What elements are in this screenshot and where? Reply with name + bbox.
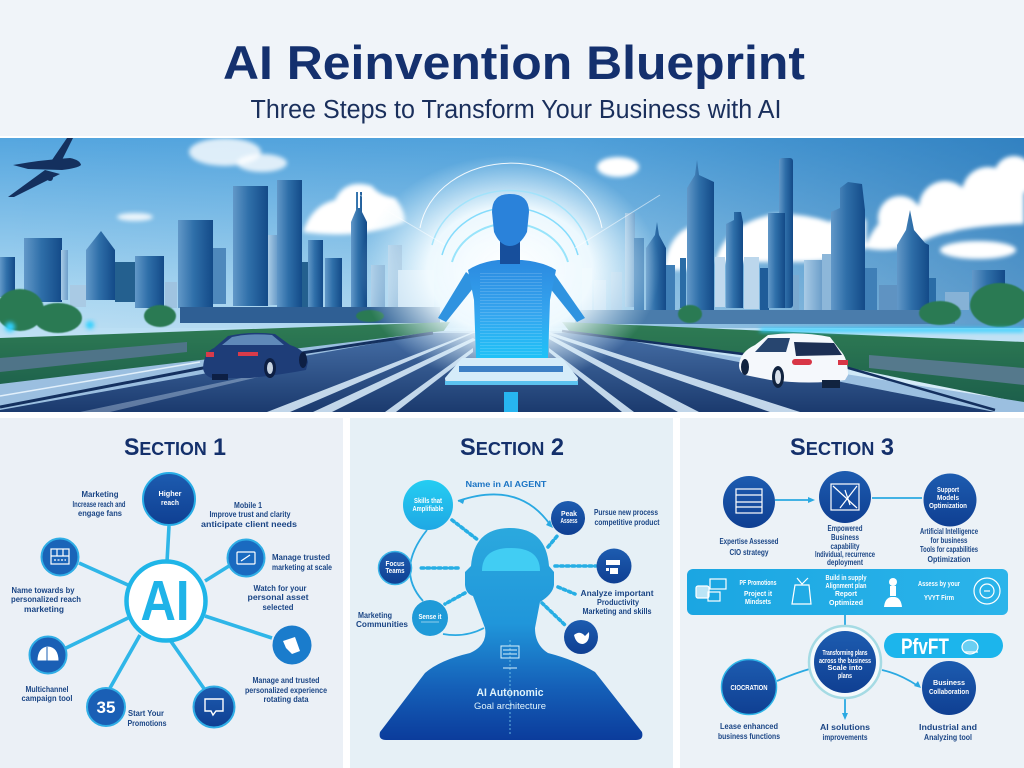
label: lower left: Multichannel — [26, 685, 68, 694]
skyline left — [0, 180, 434, 316]
label: top right: anticipate client needs — [201, 520, 298, 529]
node: lower right: Business — [933, 680, 965, 687]
silhouette label: Goal architecture — [474, 701, 546, 712]
node: top circle — [143, 473, 195, 525]
trees — [0, 283, 1024, 333]
panel: section 3 — [680, 418, 1024, 768]
label: right top: competitive product — [594, 518, 660, 527]
node: top right: Models — [937, 495, 959, 502]
node: lower right — [922, 661, 976, 715]
label: right lower: Analyze important — [580, 589, 654, 598]
band text 2: Optimized — [829, 600, 863, 607]
node: lower left — [722, 660, 776, 714]
node: top left cyan: Skills that — [414, 498, 443, 505]
fences — [0, 342, 187, 372]
label: top left: Increase reach and — [72, 500, 126, 509]
subtitle: Three Steps to Transform Your Business with AI — [250, 96, 782, 124]
label: bottom middle — [820, 723, 871, 742]
label: right top — [594, 508, 660, 527]
node: top right: Assess — [560, 518, 578, 525]
band text 1: Project it — [744, 591, 773, 598]
node icon: megaphone — [272, 626, 312, 664]
node: left: Teams — [386, 568, 405, 575]
hub: AI — [126, 562, 206, 640]
label: top right: for business — [930, 536, 968, 545]
node icon: chat — [194, 686, 234, 728]
AI humanoid figure — [438, 194, 585, 358]
band text 2: Build in supply — [826, 575, 867, 582]
node: top circle: reach — [161, 500, 179, 507]
label: top middle: deployment — [827, 558, 863, 567]
pill badge: PfvFT — [901, 634, 949, 659]
label: top middle: capability — [830, 542, 860, 551]
label: top right: Artificial Intelligence — [920, 527, 978, 536]
band icon: gauge — [974, 578, 1000, 604]
glow lines — [5, 321, 1024, 332]
hub: AI: AI — [140, 569, 190, 633]
label: left middle: marketing — [24, 605, 64, 614]
label: right upper: Manage trusted — [272, 553, 330, 562]
node: lower left: Sense it — [418, 614, 442, 621]
label: left lower — [356, 611, 409, 629]
node: left: Focus — [386, 561, 405, 568]
label: top left: Marketing — [82, 490, 119, 499]
node: central hub — [809, 626, 881, 698]
capability band — [687, 569, 1008, 615]
node icon: right — [596, 548, 632, 584]
band text 2: Alignment plan — [826, 583, 866, 590]
label: top left: engage fans — [78, 509, 123, 518]
node: lower right: Collaboration — [929, 689, 969, 696]
node: central hub: plans — [838, 673, 852, 680]
node: top left cyan — [403, 480, 453, 530]
white car — [739, 333, 848, 388]
greenery — [0, 322, 450, 384]
band text 1: PF Promotions — [740, 580, 777, 587]
hub-and-spoke links — [66, 526, 272, 690]
label: top left — [720, 537, 779, 557]
label: top middle: Business — [831, 533, 859, 542]
node: central hub: Scale into — [828, 665, 862, 672]
band text 3: YVYT Firm — [924, 595, 954, 602]
node icon: lower right — [564, 620, 598, 654]
label: right top: Pursue new process — [594, 508, 658, 517]
platform — [445, 358, 578, 412]
node icon: archive — [723, 476, 775, 528]
label: bottom right: Industrial and — [919, 723, 977, 732]
label: right middle — [248, 584, 309, 612]
title: AI Reinvention Blueprint — [223, 36, 805, 89]
connector arcs — [410, 494, 596, 635]
label: top left: Expertise Assessed — [720, 537, 779, 546]
node: central hub: across the business — [819, 658, 871, 665]
label: lower right — [245, 676, 327, 704]
label: lower right: personalized experience — [245, 686, 327, 695]
band text 3: Assess by your — [918, 581, 960, 588]
node: top circle: Higher — [158, 491, 182, 498]
heading: section 1: SECTION 1 — [124, 434, 226, 461]
label: top middle: Individual, recurrence — [815, 550, 875, 559]
label: bottom left: business functions — [718, 732, 780, 741]
silhouette label — [474, 687, 546, 712]
label: top left: CIO strategy — [730, 548, 769, 557]
label: top right: Tools for capabilities — [920, 545, 978, 554]
label: lower right: rotating data — [264, 695, 309, 704]
band text 2 — [826, 575, 867, 607]
label: right lower: Productivity — [597, 598, 639, 607]
label: top right: Mobile 1 — [234, 501, 262, 510]
label: right upper — [272, 553, 332, 572]
silhouette label: AI Autonomic — [476, 687, 544, 699]
label: bottom middle: Start Your — [128, 709, 164, 718]
label: right middle: selected — [262, 603, 294, 612]
label: node title: Name in AI AGENT — [466, 480, 547, 489]
label: left middle — [11, 586, 81, 614]
label: right middle: personal asset — [248, 593, 309, 602]
band icon: devices — [696, 579, 726, 601]
label: left middle: personalized reach — [11, 595, 81, 604]
node: top left cyan: Amplifiable — [412, 506, 444, 513]
hero banner: smart city with AI figure — [0, 138, 1024, 412]
label: bottom middle: improvements — [822, 733, 868, 742]
lower flow connectors — [777, 615, 921, 720]
label: right lower: Marketing and skills — [582, 607, 652, 616]
road and sidewalks — [0, 331, 1024, 412]
node: left — [378, 552, 412, 584]
label: bottom middle: AI solutions — [820, 723, 871, 732]
node: top right: Peak — [561, 511, 577, 518]
panel: section 1 — [0, 418, 343, 768]
band text 3 — [918, 581, 960, 602]
label: top right — [920, 527, 978, 564]
human silhouette — [380, 528, 642, 740]
label: bottom right: Analyzing tool — [924, 733, 972, 742]
skyline right — [582, 158, 1005, 316]
label: top left — [72, 490, 126, 518]
label: right lower — [580, 589, 654, 616]
panel: section 2 — [350, 418, 673, 768]
node: top right: Support — [937, 487, 960, 494]
node: lower left — [412, 600, 448, 636]
label: left middle: Name towards by — [12, 586, 75, 595]
band text 1: Mindsets — [745, 599, 771, 606]
band icon: figure — [884, 578, 902, 607]
label: left lower: Communities — [356, 620, 409, 629]
clouds — [117, 138, 1024, 270]
label: lower right: Manage and trusted — [252, 676, 320, 685]
node icon: screen — [228, 540, 264, 576]
holographic rings — [360, 163, 660, 262]
band text 2: Report — [835, 591, 858, 598]
label: top middle — [815, 524, 875, 567]
node icon: grid numerals — [87, 688, 125, 726]
pill badge — [884, 633, 1003, 659]
node icon: dashboard — [42, 538, 78, 576]
heading: section 3: SECTION 3 — [790, 434, 894, 461]
header band — [0, 0, 1024, 136]
top flow connectors — [775, 497, 922, 503]
label: bottom left — [718, 722, 780, 741]
node icon: network — [819, 471, 871, 523]
icon: document in chest — [501, 646, 519, 668]
icon: airplane — [8, 138, 81, 197]
label: top right — [201, 501, 298, 529]
label: right middle: Watch for your — [254, 584, 306, 593]
node icon: brain — [30, 636, 66, 674]
blue sedan — [203, 333, 308, 380]
label: lower left — [22, 685, 72, 703]
heading: section 2: SECTION 2 — [460, 434, 564, 461]
label: left lower: Marketing — [358, 611, 392, 620]
robot glow — [360, 155, 660, 385]
node: lower left: CIOCRATION — [730, 685, 768, 692]
label: right upper: marketing at scale — [272, 563, 332, 572]
node: top right: Optimization — [929, 503, 967, 510]
label: top middle: Empowered — [828, 524, 863, 533]
label: top right: Optimization — [928, 555, 971, 564]
node: top right — [924, 474, 976, 526]
label: top right: Improve trust and clarity — [210, 510, 291, 519]
label: lower left: campaign tool — [22, 694, 72, 703]
label: bottom left: Lease enhanced — [720, 722, 778, 731]
node: central hub: Transforming plans — [822, 650, 868, 657]
label: bottom middle — [128, 709, 167, 728]
node: top right — [551, 501, 585, 535]
label: bottom right — [919, 723, 977, 742]
band icon: lectern — [792, 578, 811, 604]
band text 1 — [740, 580, 777, 606]
label: bottom middle: Promotions — [128, 719, 167, 728]
node icon: grid numerals: 35 — [97, 698, 115, 717]
